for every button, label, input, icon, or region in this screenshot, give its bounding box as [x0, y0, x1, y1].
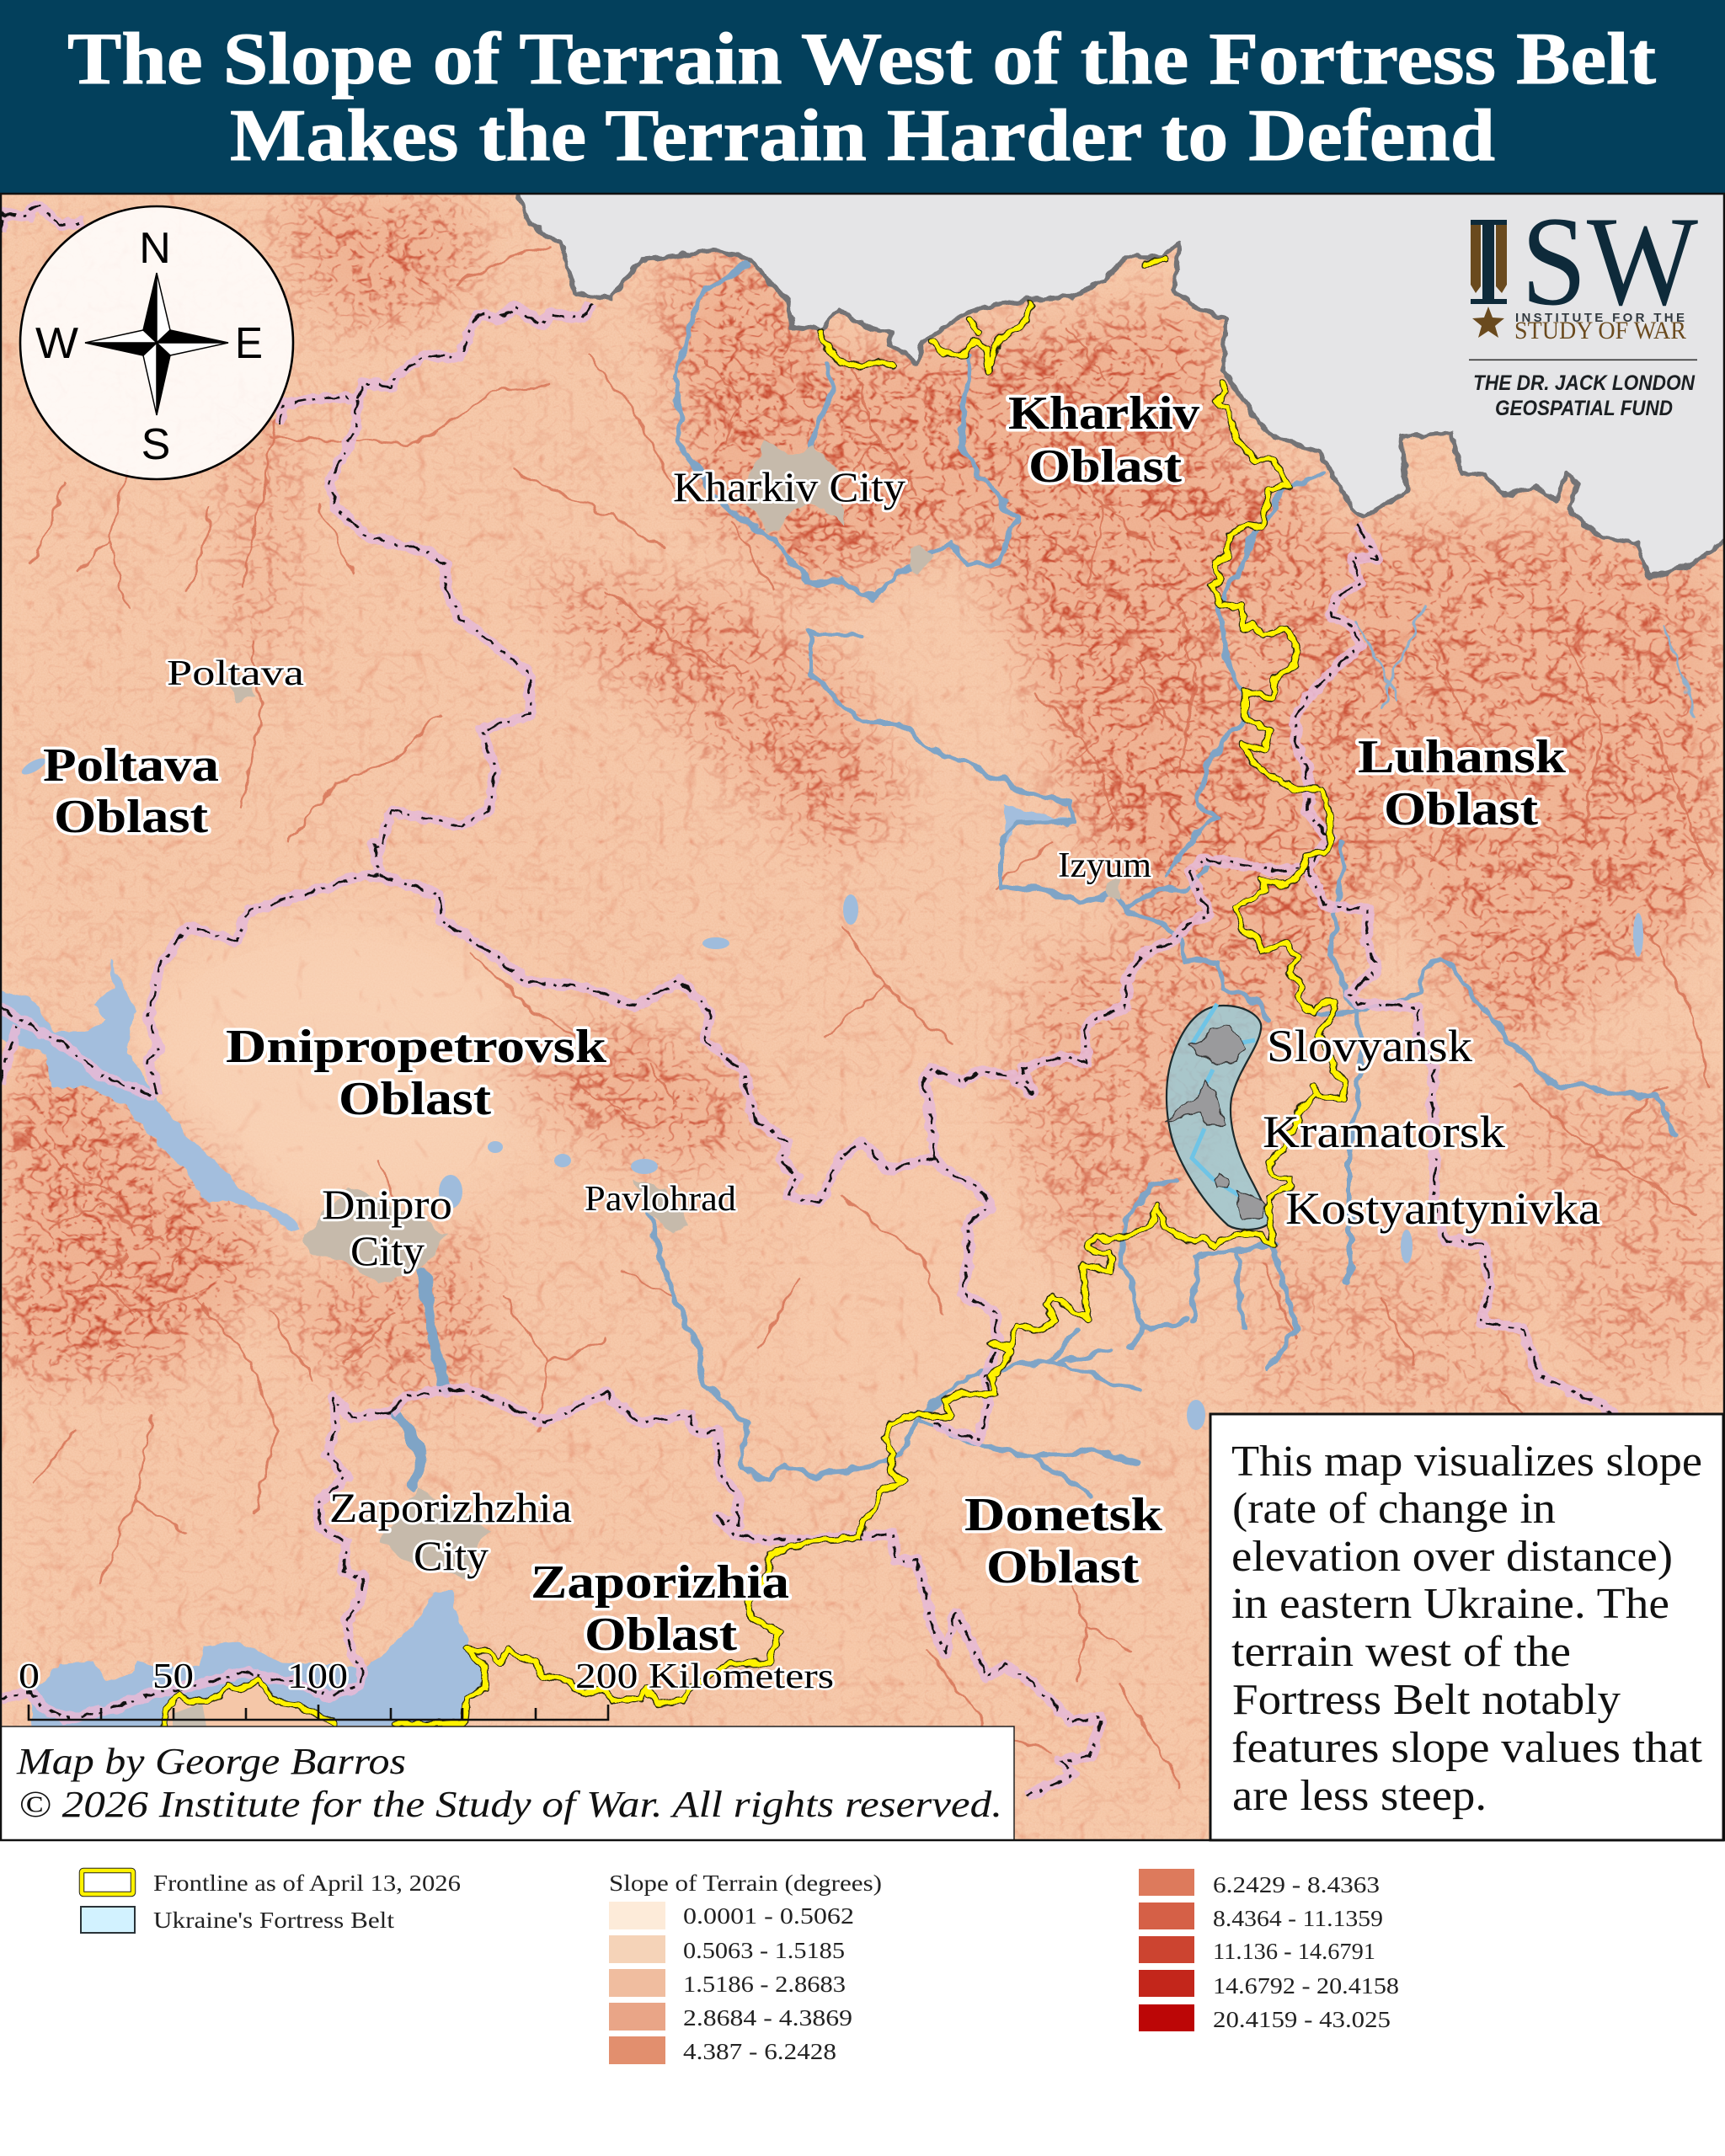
- explanatory note: are less steep.: [1232, 1772, 1487, 1820]
- oblast boundaries: [0, 205, 1613, 1796]
- legend: slope classes high: 20.4159 - 43.025: [1213, 2007, 1391, 2032]
- legend: fortress belt: [81, 1907, 395, 1933]
- city labels: City: [350, 1227, 425, 1274]
- scale bar: 100: [287, 1657, 348, 1696]
- russian territory and international border: [505, 168, 1725, 579]
- oblast labels: Oblast: [339, 1073, 491, 1125]
- title: [67, 19, 1656, 177]
- compass rose: [20, 206, 293, 479]
- legend: slope classes low: 1.5186 - 2.8683: [683, 1972, 846, 1997]
- title: The Slope of Terrain West of the Fortress Belt: [67, 19, 1656, 100]
- explanatory note: features slope values that: [1231, 1724, 1703, 1772]
- legend: slope classes high: 14.6792 - 20.4158: [1213, 1973, 1399, 1999]
- city labels: Pavlohrad: [585, 1180, 736, 1219]
- scale bar: 50: [152, 1657, 194, 1696]
- city labels: City: [414, 1532, 489, 1579]
- oblast labels: Oblast: [1384, 783, 1538, 835]
- urban areas: [227, 440, 1120, 1577]
- oblast labels: Donetsk: [964, 1489, 1163, 1541]
- legend: [81, 1869, 1399, 2064]
- city labels: Poltava: [167, 654, 304, 693]
- oblast labels: Dnipropetrovsk: [226, 1021, 607, 1073]
- credit box: Map by George Barros: [16, 1741, 406, 1782]
- oblast labels: [43, 387, 1567, 1661]
- drainage network: [25, 244, 1710, 1785]
- isw logo: SW: [1521, 190, 1698, 332]
- header banner: [0, 0, 1725, 194]
- city labels: [167, 463, 1600, 1579]
- oblast labels: Kharkiv: [1008, 387, 1199, 440]
- legend: slope classes high: 11.136 - 14.6791: [1213, 1939, 1375, 1964]
- compass rose: E: [235, 319, 263, 368]
- explanatory note: elevation over distance): [1231, 1533, 1673, 1581]
- isw logo: INSTITUTE FOR THE: [1515, 311, 1685, 325]
- ukraine's fortress belt: [1167, 1004, 1268, 1230]
- legend: fortress belt: Ukraine's Fortress Belt: [153, 1908, 395, 1933]
- legend: slope classes high: 6.2429 - 8.4363: [1213, 1872, 1380, 1897]
- oblast labels: Luhansk: [1358, 731, 1567, 783]
- oblast labels: Oblast: [54, 791, 208, 843]
- frontline: [163, 259, 1345, 1726]
- isw logo: THE DR. JACK LONDON: [1473, 371, 1696, 395]
- explanatory note: terrain west of the: [1231, 1628, 1571, 1676]
- reservoirs: [2, 804, 1068, 1726]
- city labels: Zaporizhzhia: [329, 1484, 572, 1531]
- oblast labels: Oblast: [986, 1541, 1139, 1593]
- legend: slope classes low: 4.387 - 6.2428: [683, 2039, 836, 2064]
- city labels: Kharkiv City: [673, 463, 905, 510]
- explanatory note: This map visualizes slope: [1231, 1438, 1702, 1486]
- credit box: © 2026 Institute for the Study of War. All rights reserved.: [19, 1784, 1002, 1825]
- scale bar: 0: [19, 1657, 40, 1696]
- city labels: Slovyansk: [1267, 1021, 1472, 1071]
- explanatory note: in eastern Ukraine. The: [1231, 1580, 1669, 1628]
- isw logo: [1469, 190, 1698, 420]
- isw logo: GEOSPATIAL FUND: [1495, 397, 1673, 420]
- map frame: [1, 194, 1724, 1840]
- city labels: Kramatorsk: [1263, 1107, 1505, 1157]
- map panel: [0, 168, 1725, 1844]
- compass star: [85, 273, 228, 415]
- compass rose: N: [139, 224, 171, 273]
- explanatory note: (rate of change in: [1232, 1485, 1556, 1533]
- isw logo: STUDY OF WAR: [1514, 317, 1686, 344]
- explanatory note: Fortress Belt notably: [1232, 1676, 1621, 1724]
- legend: slope classes low: 2.8684 - 4.3869: [683, 2005, 852, 2031]
- legend: slope classes low: 0.0001 - 0.5062: [683, 1903, 854, 1929]
- city labels: Kostyantynivka: [1285, 1183, 1600, 1234]
- oblast labels: Poltava: [43, 739, 219, 792]
- oblast labels: Oblast: [1028, 440, 1182, 493]
- city labels: Dnipro: [322, 1181, 452, 1228]
- credit box: [0, 1726, 1014, 1840]
- water bodies and rivers: [0, 263, 1693, 1844]
- fortress cities: [1167, 1026, 1267, 1221]
- oblast labels: Oblast: [585, 1609, 737, 1661]
- legend: slope classes low: Slope of Terrain (degrees): [609, 1870, 882, 1896]
- legend: frontline: Frontline as of April 13, 2026: [153, 1870, 461, 1896]
- title: Makes the Terrain Harder to Defend: [230, 95, 1495, 177]
- compass rose: S: [142, 420, 170, 469]
- land south of the reservoir: [168, 1683, 393, 1726]
- legend: slope classes high: 8.4364 - 11.1359: [1213, 1906, 1383, 1931]
- legend: slope classes low: 0.5063 - 1.5185: [683, 1938, 845, 1963]
- city labels: Izyum: [1058, 846, 1151, 885]
- logo pillar: [1471, 220, 1507, 304]
- explanatory note: [1210, 1414, 1723, 1840]
- scale bar: 200 Kilometers: [575, 1657, 834, 1696]
- compass rose: W: [35, 319, 78, 368]
- oblast labels: Zaporizhia: [531, 1556, 789, 1609]
- legend: slope classes low: [609, 1870, 882, 2064]
- legend: slope classes high: [1139, 1869, 1399, 2032]
- scale bar: [19, 1657, 834, 1720]
